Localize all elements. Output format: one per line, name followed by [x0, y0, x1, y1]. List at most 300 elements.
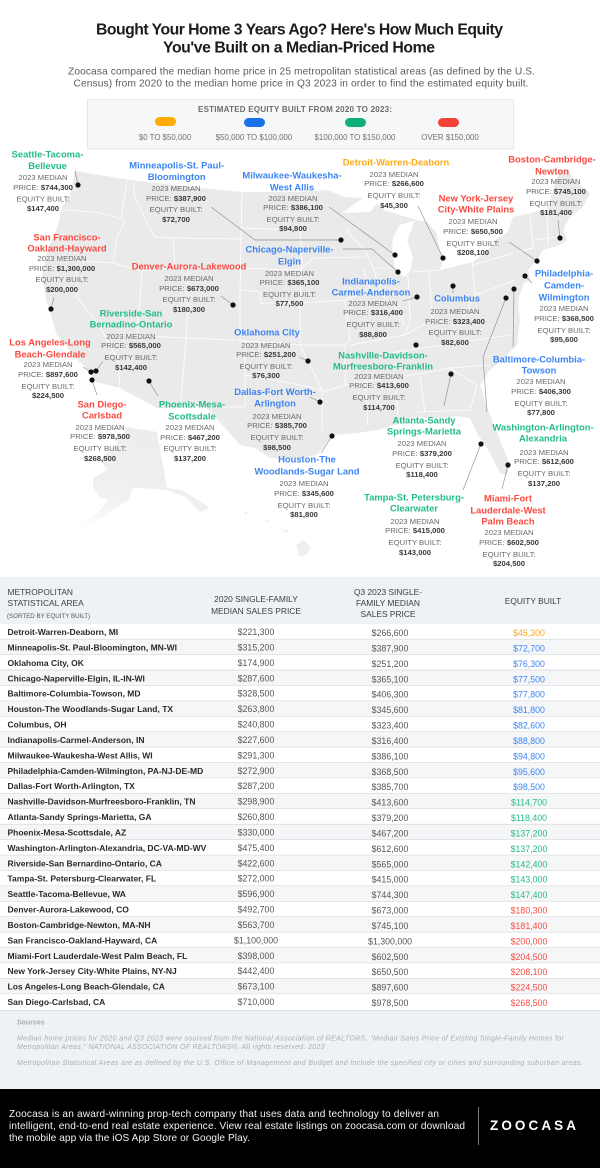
map label: Riverside: 2023 MEDIAN: [106, 332, 156, 341]
row: Miami: $398,000: [238, 951, 274, 961]
row: Houston: $263,800: [238, 704, 274, 714]
row: Riverside: $565,000: [372, 859, 408, 869]
row: San Diego: $978,500: [372, 998, 408, 1008]
map label: Philadelphia: Philadelphia-: [535, 268, 593, 278]
row: Miami: $204,500: [511, 952, 547, 962]
map label: Oklahoma City: [234, 326, 301, 380]
row: San Diego: $710,000: [238, 997, 274, 1007]
map label: Indianapolis: [332, 276, 411, 339]
map label: Los Angeles: Los Angeles-Long: [9, 336, 91, 348]
row: Oklahoma City: $251,200: [372, 659, 408, 669]
legend heading: ESTIMATED EQUITY BUILT FROM 2020 TO 2023:: [198, 105, 392, 114]
footer text: [9, 1109, 465, 1144]
map label: Chicago: Elgin: [278, 256, 301, 266]
row: Nashville: $298,900: [238, 797, 274, 807]
row: Tampa: [0, 871, 600, 886]
map label: Columbus: $82,600: [441, 338, 469, 347]
row: Atlanta: Atlanta-Sandy Springs-Marietta, GA: [8, 812, 152, 822]
map label: Oklahoma City: $76,300: [252, 371, 280, 380]
map label: Seattle: Bellevue: [28, 160, 67, 171]
sources text: [17, 1036, 583, 1067]
table: [0, 577, 600, 1010]
footer text: Zoocasa is an award-winning prop-tech company that uses data and technology to deliver an: [9, 1109, 439, 1120]
row: New York: [0, 963, 600, 979]
row: Seattle: $744,300: [372, 890, 408, 900]
row: Phoenix: $330,000: [238, 828, 274, 838]
legend item: $0 to $50,000: [139, 117, 192, 142]
row: Tampa: Tampa-St. Petersburg-Clearwater, FL: [8, 874, 156, 884]
map label: Atlanta: $118,400: [406, 470, 438, 479]
row: Indianapolis: $316,400: [372, 736, 408, 746]
legend item: $50,000 to $100,000: [216, 118, 293, 142]
map label: Philadelphia: EQUITY BUILT:: [537, 326, 591, 335]
map label: Tampa: Tampa-St. Petersburg-: [364, 492, 464, 502]
map label: Detroit: $45,300: [380, 201, 408, 210]
map label: Houston: Woodlands-Sugar Land: [254, 466, 360, 476]
row: Detroit: Detroit-Warren-Deaborn, MI: [8, 627, 118, 637]
map label: Indianapolis: PRICE: $316,400: [343, 308, 403, 317]
title: Bought Your Home 3 Years Ago? Here's How Much Equity: [96, 22, 503, 38]
map label: Washington: [492, 422, 594, 488]
row: Indianapolis: $227,600: [238, 735, 274, 745]
map label: Boston: Boston-Cambridge-: [508, 154, 596, 164]
map label: Milwaukee: [242, 170, 342, 233]
map label: Minneapolis: $72,700: [162, 215, 190, 224]
map label: San Diego: 2023 MEDIAN: [75, 423, 125, 432]
row: Philadelphia: $368,500: [372, 767, 408, 777]
map label: Chicago: $77,500: [276, 299, 303, 308]
map label: Indianapolis: 2023 MEDIAN: [348, 299, 398, 308]
map label: Minneapolis: [129, 160, 224, 224]
map label: Phoenix: $137,200: [174, 454, 206, 463]
row: Dallas: $98,500: [513, 782, 545, 792]
map label: Atlanta: [387, 414, 462, 479]
row: Houston: Houston-The Woodlands-Sugar Land, TX: [8, 704, 173, 714]
row: Detroit: [0, 624, 600, 640]
title: [96, 22, 503, 56]
row: Los Angeles: Los Angeles-Long Beach-Glendale, CA: [8, 982, 165, 992]
footer text: the mobile app via the iOS App Store or Google Play.: [9, 1133, 250, 1144]
row: Oklahoma City: Oklahoma City, OK: [8, 658, 85, 668]
map label: Seattle: [12, 148, 83, 213]
row: Miami: $602,500: [372, 952, 408, 962]
row: Washington: $137,200: [511, 844, 547, 854]
map label: Miami: Palm Beach: [481, 516, 535, 526]
row: Riverside: Riverside-San Bernardino-Ontario, CA: [8, 858, 162, 868]
row: New York: $650,500: [372, 967, 408, 977]
row: Minneapolis: $72,700: [513, 643, 545, 653]
map label: Indianapolis: Carmel-Anderson: [332, 286, 411, 298]
map label: Minneapolis: PRICE: $387,900: [146, 194, 206, 203]
map label: Minneapolis: 2023 MEDIAN: [151, 184, 201, 193]
map label: New York: $208,100: [457, 248, 489, 257]
map label: Riverside: EQUITY BUILT:: [104, 353, 158, 362]
map label: Baltimore: [493, 354, 585, 417]
row: Los Angeles: $673,100: [238, 982, 274, 992]
map label: Chicago: PRICE: $365,100: [260, 278, 319, 287]
table header: Q3 2023 SINGLE-: [354, 587, 422, 597]
row: Detroit: $45,300: [513, 628, 545, 638]
map label: Los Angeles: EQUITY BUILT:: [21, 382, 75, 391]
map label: Detroit: PRICE: $266,600: [364, 179, 424, 188]
sources heading: Sources: [17, 1020, 45, 1026]
row: Nashville: $413,600: [372, 798, 408, 808]
row: Washington: [0, 840, 600, 856]
map label: San Diego: $268,500: [84, 454, 116, 463]
map label: Nashville: 2023 MEDIAN: [354, 372, 404, 381]
row: Chicago: $287,600: [238, 673, 274, 683]
map label: Seattle: PRICE: $744,300: [13, 183, 73, 192]
row: Columbus: $240,800: [238, 720, 274, 730]
map label: Tampa: $143,000: [399, 548, 431, 557]
row: Philadelphia: $95,600: [513, 767, 545, 777]
table header: FAMILY MEDIAN: [356, 598, 420, 608]
row: Nashville: Nashville-Davidson-Murfreesboro-Franklin, TN: [8, 797, 195, 807]
row: Denver: $180,300: [511, 906, 547, 916]
row: Minneapolis: $387,900: [372, 643, 408, 653]
map label: Los Angeles: 2023 MEDIAN: [23, 360, 73, 369]
row: Phoenix: Phoenix-Mesa-Scottsdale, AZ: [8, 828, 126, 838]
map label: Philadelphia: Wilmington: [539, 292, 590, 302]
map label: Washington: PRICE: $612,600: [514, 457, 574, 466]
map label: Miami: $204,500: [493, 559, 525, 568]
map label: San Francisco: 2023 MEDIAN: [37, 254, 87, 263]
map: state borders: [38, 180, 560, 430]
table header: EQUITY BUILT: [505, 596, 561, 606]
map label: Atlanta: Atlanta-Sandy: [392, 414, 456, 426]
row: Dallas: $385,700: [372, 782, 408, 792]
row: Baltimore: $77,800: [513, 690, 545, 700]
row: Houston: $345,600: [372, 705, 408, 715]
map label: New York: EQUITY BUILT:: [446, 239, 500, 248]
logo: ZOOCASA: [490, 1118, 576, 1133]
row: San Diego: $268,500: [511, 998, 547, 1008]
map label: Miami: [470, 492, 546, 568]
map label: Oklahoma City: PRICE: $251,200: [236, 350, 296, 359]
map label: Phoenix: EQUITY BUILT:: [163, 444, 217, 453]
map label: Miami: EQUITY BUILT:: [482, 550, 536, 559]
map label: Philadelphia: Camden-: [544, 280, 584, 290]
row: Miami: Miami-Fort Lauderdale-West Palm Beach, FL: [8, 951, 187, 961]
map label: San Diego: [70, 398, 130, 463]
row: Milwaukee: $386,100: [372, 751, 408, 761]
row: Seattle: Seattle-Tacoma-Bellevue, WA: [8, 889, 126, 899]
row: Indianapolis: Indianapolis-Carmel-Anderson, IN: [8, 735, 144, 745]
sources text: Metropolitan Areas." NATIONAL ASSOCIATION OF REALTORS®. All rights reserved. 2023: [17, 1043, 325, 1051]
map label: Columbus: 2023 MEDIAN: [430, 307, 480, 316]
map label: Houston: Houston-The: [278, 454, 336, 464]
map label: San Diego: Carlsbad: [82, 410, 122, 420]
intro text: Census) from 2020 to the median home price in Q3 2023 in order to find the estimated equity built.: [74, 78, 528, 90]
map label: Denver: $180,300: [173, 305, 205, 314]
sources text: Metropolitan Statistical Areas are as defined by the U.S. Office of Management and Budget and include the specified city or cities and surrounding suburban areas.: [17, 1060, 583, 1067]
row: San Diego: [0, 994, 600, 1010]
row: San Francisco: [0, 932, 600, 948]
map label: Boston: [508, 154, 596, 217]
map label: Denver: Denver-Aurora-Lakewood: [132, 260, 247, 272]
map label: San Diego: PRICE: $978,500: [70, 432, 130, 441]
map label: San Diego: EQUITY BUILT:: [73, 444, 127, 453]
map label: Baltimore: Baltimore-Columbia-: [493, 354, 585, 364]
map label: Minneapolis: Minneapolis-St. Paul-: [129, 160, 224, 170]
map label: Dallas: $98,500: [263, 443, 291, 452]
map label: Atlanta: EQUITY BUILT:: [395, 461, 449, 470]
row: Riverside: $142,400: [511, 859, 547, 869]
row: Minneapolis: $315,200: [238, 642, 274, 652]
map label: Milwaukee: Milwaukee-Waukesha-: [242, 170, 342, 180]
row: Atlanta: $379,200: [372, 813, 408, 823]
row: Milwaukee: $291,300: [238, 750, 274, 760]
map label: Dallas: Dallas-Fort Worth-: [234, 386, 316, 397]
row: Detroit: $266,600: [372, 628, 408, 638]
map label: Nashville: Murfreesboro-Franklin: [333, 360, 433, 372]
map label: Milwaukee: PRICE: $386,100: [263, 203, 323, 212]
map: Hawaii: [244, 511, 311, 556]
map label: Boston: PRICE: $745,100: [526, 187, 586, 196]
map label: Riverside: Riverside-San: [100, 308, 163, 318]
map label: Seattle: 2023 MEDIAN: [18, 173, 68, 182]
row: Washington: Washington-Arlington-Alexandria, DC-VA-MD-WV: [8, 843, 207, 853]
map label: Columbus: EQUITY BUILT:: [428, 328, 482, 337]
map of the United States: [38, 170, 590, 556]
map label: New York: New York-Jersey: [439, 192, 514, 204]
map label: Riverside: Bernadino-Ontario: [90, 318, 173, 330]
leader lines and location markers: [48, 171, 563, 490]
map label: Miami: Miami-Fort: [484, 492, 532, 504]
map label: San Francisco: San Francisco-: [33, 232, 101, 242]
sources panel: [0, 1010, 600, 1089]
row: Columbus: [0, 716, 600, 732]
map label: Atlanta: Springs-Marietta: [387, 426, 462, 436]
map label: Dallas: 2023 MEDIAN: [252, 412, 302, 421]
map label: Washington: EQUITY BUILT:: [517, 469, 571, 478]
map label: Baltimore: PRICE: $406,300: [511, 387, 571, 396]
row: Columbus: $323,400: [372, 720, 408, 730]
map label: Boston: 2023 MEDIAN: [531, 177, 581, 186]
map: Alaska: [80, 427, 210, 527]
legend item: $0 to $50,000: $0 TO $50,000: [139, 133, 192, 142]
map label: Phoenix: 2023 MEDIAN: [165, 423, 215, 432]
map label: Baltimore: Towson: [522, 364, 557, 376]
row: Oklahoma City: $174,900: [238, 658, 274, 668]
row: Atlanta: $260,800: [238, 812, 274, 822]
table header: SALES PRICE: [361, 609, 416, 619]
table header: (SORTED BY EQUITY BUILT): [7, 613, 90, 620]
map label: Phoenix: PRICE: $467,200: [160, 433, 220, 442]
row: Los Angeles: $224,500: [511, 983, 547, 993]
map label: Washington: Washington-Arlington-: [492, 422, 594, 432]
map label: Los Angeles: PRICE: $897,600: [18, 370, 78, 379]
legend item: over $150,000: OVER $150,000: [421, 133, 479, 142]
map label: Chicago: Chicago-Naperville-: [245, 244, 334, 254]
row: Houston: $81,800: [513, 705, 545, 715]
row: Denver: Denver-Aurora-Lakewood, CO: [8, 905, 129, 915]
map label: Philadelphia: [534, 268, 594, 344]
map label: Atlanta: 2023 MEDIAN: [397, 439, 447, 448]
row: Baltimore: $328,500: [238, 689, 274, 699]
map label: Minneapolis: Bloomington: [148, 171, 206, 182]
map label: San Francisco: [27, 232, 107, 294]
row: Atlanta: [0, 809, 600, 825]
row: Washington: $612,600: [372, 844, 408, 854]
map label: San Francisco: EQUITY BUILT:: [35, 275, 89, 284]
sources text: Median home prices for 2020 and Q3 2023 were sourced from the National Association of REALTORS. "Median Sales Price of Existing Single-Family Homes for: [17, 1036, 565, 1042]
map label: Seattle: EQUITY BUILT:: [16, 194, 70, 204]
map label: Minneapolis: EQUITY BUILT:: [149, 205, 203, 214]
map label: Denver: [132, 260, 247, 314]
map label: Philadelphia: $95,600: [550, 335, 578, 344]
map label: Columbus: [425, 292, 485, 347]
row: Columbus: Columbus, OH: [8, 720, 67, 730]
table header: STATISTICAL AREA: [8, 598, 84, 608]
map label: New York: [438, 192, 514, 257]
map label: San Francisco: PRICE: $1,300,000: [29, 264, 95, 273]
map label: Houston: [254, 454, 360, 519]
map label: Philadelphia: 2023 MEDIAN: [539, 304, 589, 313]
map label: Nashville: PRICE: $413,600: [349, 381, 409, 390]
row: Detroit: $221,300: [238, 627, 274, 637]
row: New York: $442,400: [238, 966, 274, 976]
row: Seattle: $147,400: [511, 890, 547, 900]
legend item: $50,000 to $100,000: $50,000 TO $100,000: [216, 133, 293, 142]
map label: Los Angeles: Beach-Glendale: [15, 348, 85, 360]
row: Washington: $475,400: [238, 843, 274, 853]
map label: Riverside: $142,400: [115, 363, 147, 372]
table header: [0, 577, 600, 624]
map label: New York: 2023 MEDIAN: [448, 217, 498, 226]
row: Philadelphia: Philadelphia-Camden-Wilmington, PA-NJ-DE-MD: [8, 766, 203, 776]
map label: Los Angeles: $224,500: [32, 391, 64, 400]
row: San Francisco: $1,300,000: [368, 936, 412, 946]
map label: Houston: $81,800: [290, 510, 318, 519]
map label: Houston: EQUITY BUILT:: [277, 501, 331, 510]
row: Denver: [0, 902, 600, 917]
legend item: $100,000 to $150,000: $100,000 TO $150,000: [315, 133, 396, 142]
map label: Chicago: [245, 244, 334, 308]
map label: Baltimore: 2023 MEDIAN: [516, 377, 566, 386]
row: Atlanta: $118,400: [511, 813, 547, 823]
row: Phoenix: [0, 824, 600, 840]
table header: METROPOLITAN: [8, 587, 73, 597]
map label: Dallas: EQUITY BUILT:: [250, 433, 304, 442]
map label: Riverside: [90, 308, 173, 372]
row: Phoenix: $137,200: [511, 828, 547, 838]
map label: Milwaukee: 2023 MEDIAN: [268, 194, 318, 203]
row: Nashville: $114,700: [511, 798, 547, 808]
map label: Chicago: 2023 MEDIAN: [265, 269, 314, 278]
map label: Washington: Alexandria: [519, 432, 568, 444]
map label: Dallas: [234, 386, 316, 452]
map label: Tampa: PRICE: $415,000: [385, 526, 445, 535]
map label: Dallas: Arlington: [254, 398, 296, 408]
row: Boston: $181,400: [511, 921, 547, 931]
map label: Columbus: PRICE: $323,400: [425, 317, 485, 326]
row: Denver: $673,000: [372, 906, 408, 916]
row: Riverside: [0, 855, 600, 871]
map label: Detroit: [343, 156, 449, 210]
map label: Baltimore: EQUITY BUILT:: [514, 399, 568, 408]
map label: Washington: $137,200: [528, 479, 560, 488]
row: Minneapolis: Minneapolis-St. Paul-Bloomington, MN-WI: [8, 642, 177, 652]
map label: Milwaukee: EQUITY BUILT:: [266, 215, 320, 224]
row: Boston: Boston-Cambridge-Newton, MA-NH: [8, 920, 151, 930]
map label: Tampa: 2023 MEDIAN: [390, 517, 440, 526]
row: Dallas: $287,200: [238, 781, 274, 791]
row: San Francisco: $1,100,000: [234, 935, 278, 945]
row: Chicago: [0, 670, 600, 686]
map label: Oklahoma City: Oklahoma City: [234, 326, 301, 338]
map label: Nashville: Nashville-Davidson-: [338, 350, 428, 360]
map label: Indianapolis: $88,800: [359, 330, 387, 339]
map label: Phoenix: [159, 398, 225, 463]
map label: Denver: EQUITY BUILT:: [162, 295, 216, 304]
table header: MEDIAN SALES PRICE: [211, 606, 301, 616]
row: Chicago: $365,100: [372, 674, 408, 684]
row: San Francisco: San Francisco-Oakland-Hayward, CA: [8, 935, 157, 945]
map label: Miami: 2023 MEDIAN: [484, 528, 534, 537]
map label: San Francisco: Oakland-Hayward: [27, 242, 107, 254]
row: Dallas: [0, 778, 600, 794]
map label: Denver: 2023 MEDIAN: [164, 274, 214, 283]
map label: Milwaukee: $94,800: [279, 224, 307, 233]
row: Dallas: Dallas-Fort Worth-Arlington, TX: [8, 781, 135, 791]
map label: Tampa: [364, 492, 464, 557]
row: San Francisco: $200,000: [511, 936, 547, 946]
row: Oklahoma City: $76,300: [513, 659, 545, 669]
row: Boston: $563,700: [238, 920, 274, 930]
map label: Chicago: EQUITY BUILT:: [263, 290, 316, 299]
row: Milwaukee: $94,800: [513, 751, 545, 761]
map label: Indianapolis: Indianapolis-: [342, 276, 400, 286]
map label: Indianapolis: EQUITY BUILT:: [346, 320, 400, 329]
map label: Tampa: EQUITY BUILT:: [388, 538, 442, 547]
map label: Houston: PRICE: $345,600: [274, 489, 334, 498]
map label: Oklahoma City: EQUITY BUILT:: [239, 362, 293, 371]
row: Chicago: $77,500: [513, 674, 545, 684]
map label: Dallas: PRICE: $385,700: [247, 421, 307, 430]
row: Milwaukee: [0, 747, 600, 763]
legend: [88, 100, 514, 149]
row: San Diego: San Diego-Carlsbad, CA: [8, 997, 105, 1007]
row: Denver: $492,700: [238, 905, 274, 915]
row: Indianapolis: $88,800: [513, 736, 545, 746]
map label: Miami: PRICE: $602,500: [479, 538, 539, 547]
map label: Boston: Newton: [535, 166, 569, 176]
map label: Los Angeles: [9, 336, 91, 400]
row: Houston: [0, 701, 600, 717]
map label: Columbus: Columbus: [434, 292, 480, 304]
map label: Oklahoma City: 2023 MEDIAN: [241, 341, 291, 350]
map label: Seattle: Seattle-Tacoma-: [12, 148, 83, 160]
map label: Nashville: [333, 350, 433, 412]
intro text: [68, 66, 535, 90]
row: Los Angeles: [0, 979, 600, 994]
row: Tampa: $272,000: [238, 874, 274, 884]
row: Baltimore: $406,300: [372, 690, 408, 700]
row: Baltimore: Baltimore-Columbia-Towson, MD: [8, 689, 141, 699]
row: Nashville: [0, 794, 600, 809]
row: Tampa: $415,000: [372, 875, 408, 885]
row: New York: $208,100: [511, 967, 547, 977]
map label: Houston: 2023 MEDIAN: [279, 479, 329, 488]
title: You've Built on a Median-Priced Home: [163, 40, 435, 56]
map label: Tampa: Clearwater: [390, 502, 438, 514]
row: Seattle: $596,900: [238, 889, 274, 899]
row: Philadelphia: $272,900: [238, 766, 274, 776]
legend item: over $150,000: [421, 118, 479, 142]
row: Milwaukee: Milwaukee-Waukesha-West Allis, WI: [8, 750, 153, 760]
row: Riverside: $422,600: [238, 858, 274, 868]
